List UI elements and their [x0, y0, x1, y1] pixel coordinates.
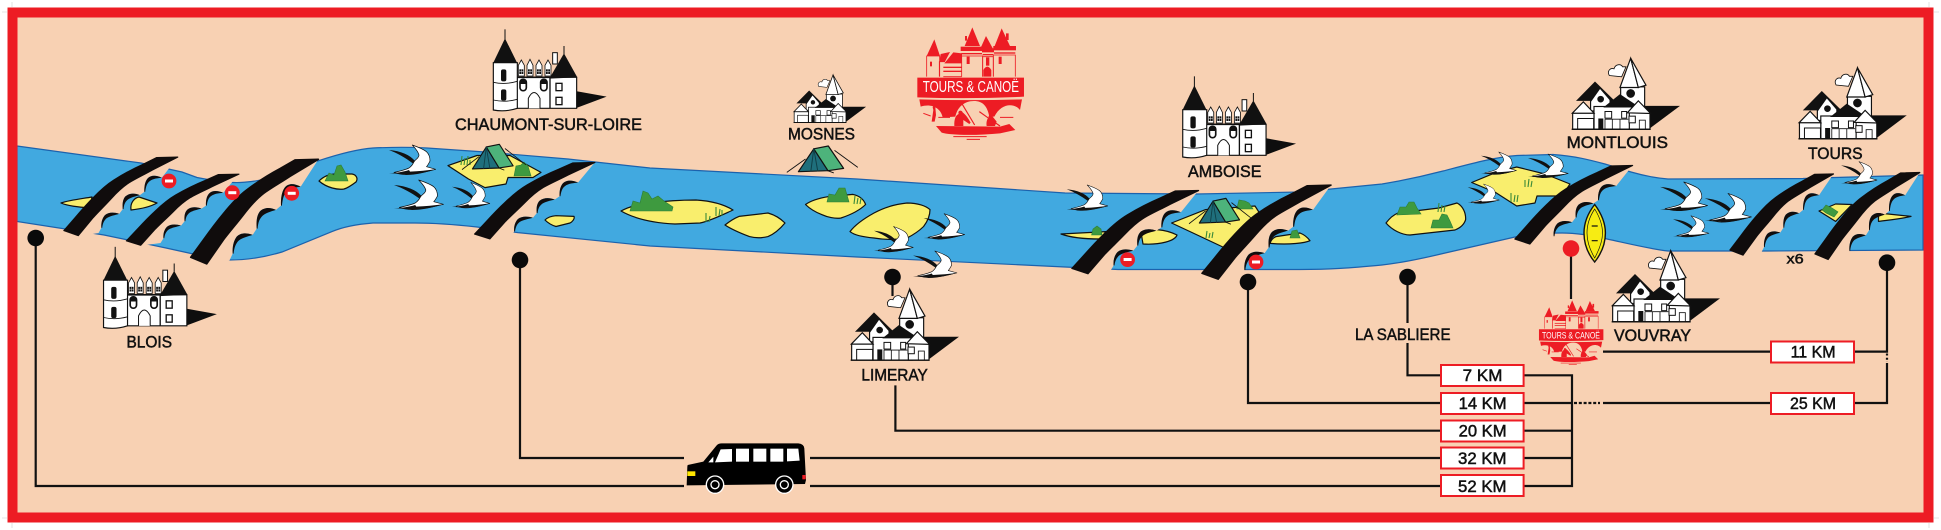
village: Mosnes [794, 75, 866, 123]
distance box: 7 KM [1441, 365, 1524, 386]
location dots [27, 230, 1895, 290]
label: Montlouis: MONTLOUIS [1567, 134, 1668, 152]
icon: tent at Chaumont [462, 144, 526, 170]
distance box: 7 KM: 7 KM [1463, 367, 1502, 385]
label: Mosnes: MOSNES [788, 126, 855, 144]
village: Limeray [851, 289, 959, 360]
label: Vouvray: VOUVRAY [1614, 327, 1691, 345]
no entry signs [162, 174, 1263, 269]
distance box: 25 KM: 25 KM [1790, 395, 1836, 413]
distance box: 20 KM: 20 KM [1459, 422, 1507, 440]
label: Blois: BLOIS [126, 334, 172, 352]
logo: Tours & Canoë small: TOURS & CANOË [1542, 330, 1600, 342]
label: Amboise: AMBOISE [1188, 163, 1262, 181]
distance box: 14 KM [1441, 393, 1524, 414]
distance box: 11 KM [1771, 342, 1854, 362]
islands [61, 156, 1911, 248]
logo: Tours & Canoë large: TOURS & CANOË [923, 79, 1019, 96]
village: Vouvray [1612, 251, 1720, 322]
icon: minibus [687, 443, 806, 494]
label: La Sabliere: LA SABLIERE [1355, 326, 1450, 344]
icon: tent at Mosnes [787, 146, 858, 173]
river Loire [17, 146, 1923, 270]
distance box: 11 KM: 11 KM [1791, 344, 1836, 362]
distance box: 52 KM [1441, 475, 1524, 496]
start point dot: Vouvray [1563, 240, 1579, 257]
distance box: 20 KM [1441, 420, 1524, 442]
logo: Tours & Canoë small [1539, 300, 1603, 365]
distance box: 25 KM [1771, 393, 1854, 414]
icon: tent at Amboise [1189, 198, 1252, 224]
village: Tours [1798, 68, 1907, 139]
label: Tours: TOURS [1808, 145, 1863, 163]
castle: Amboise [1183, 76, 1296, 158]
castle: Blois [104, 247, 217, 328]
bridges [64, 157, 1920, 280]
birds [389, 145, 1877, 278]
label: Limeray: LIMERAY [861, 366, 928, 384]
distance box: 52 KM: 52 KM [1458, 478, 1506, 496]
distance box: 32 KM [1441, 448, 1524, 468]
icon: canoe [1584, 204, 1605, 262]
label: x6: x6 [1786, 251, 1804, 267]
logo: Tours & Canoë large [917, 27, 1024, 139]
distance box: 14 KM: 14 KM [1459, 395, 1507, 413]
route lines [36, 238, 1887, 486]
village: Montlouis [1572, 58, 1680, 129]
distance box: 32 KM: 32 KM [1458, 450, 1506, 468]
label: Chaumont-sur-Loire: CHAUMONT-SUR-LOIRE [455, 116, 642, 134]
castle: Chaumont-sur-Loire [493, 29, 607, 111]
